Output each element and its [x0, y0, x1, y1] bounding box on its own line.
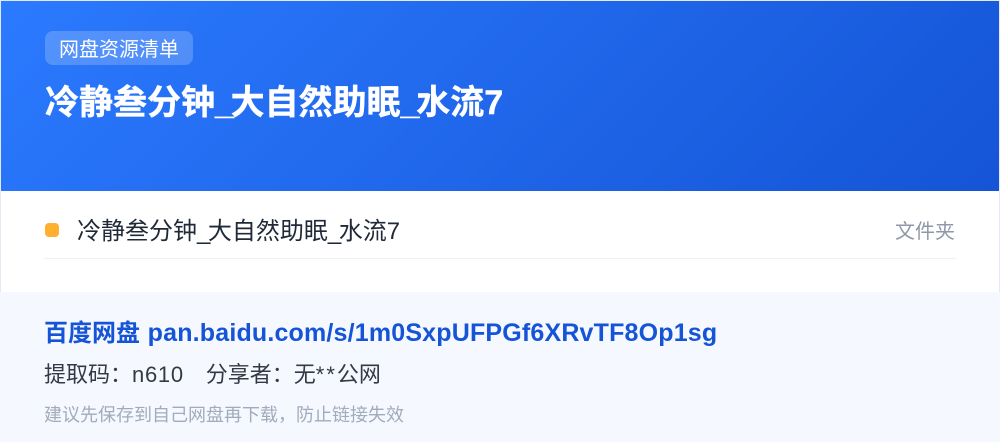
file name: 冷静叁分钟_大自然助眠_水流7 [77, 218, 400, 245]
file type label: 文件夹 [895, 221, 955, 243]
share link: 百度网盘 pan.baidu.com/s/1m0SxpUFPGf6XRvTF8Op1sg [44, 319, 717, 347]
panel: share info footer [0, 292, 1000, 442]
badge: 网盘资源清单 [45, 31, 193, 65]
badge: 网盘资源清单: 网盘资源清单 [59, 39, 179, 61]
icon: orange folder marker [45, 223, 59, 237]
title: 冷静叁分钟_大自然助眠_水流7 [45, 84, 503, 122]
panel: header banner [1, 1, 999, 191]
panel: file row [44, 191, 956, 259]
extraction code and sharer: 提取码：n610 分享者：无**公网 [44, 362, 381, 387]
hint text: 建议先保存到自己网盘再下载，防止链接失效 [44, 405, 404, 425]
